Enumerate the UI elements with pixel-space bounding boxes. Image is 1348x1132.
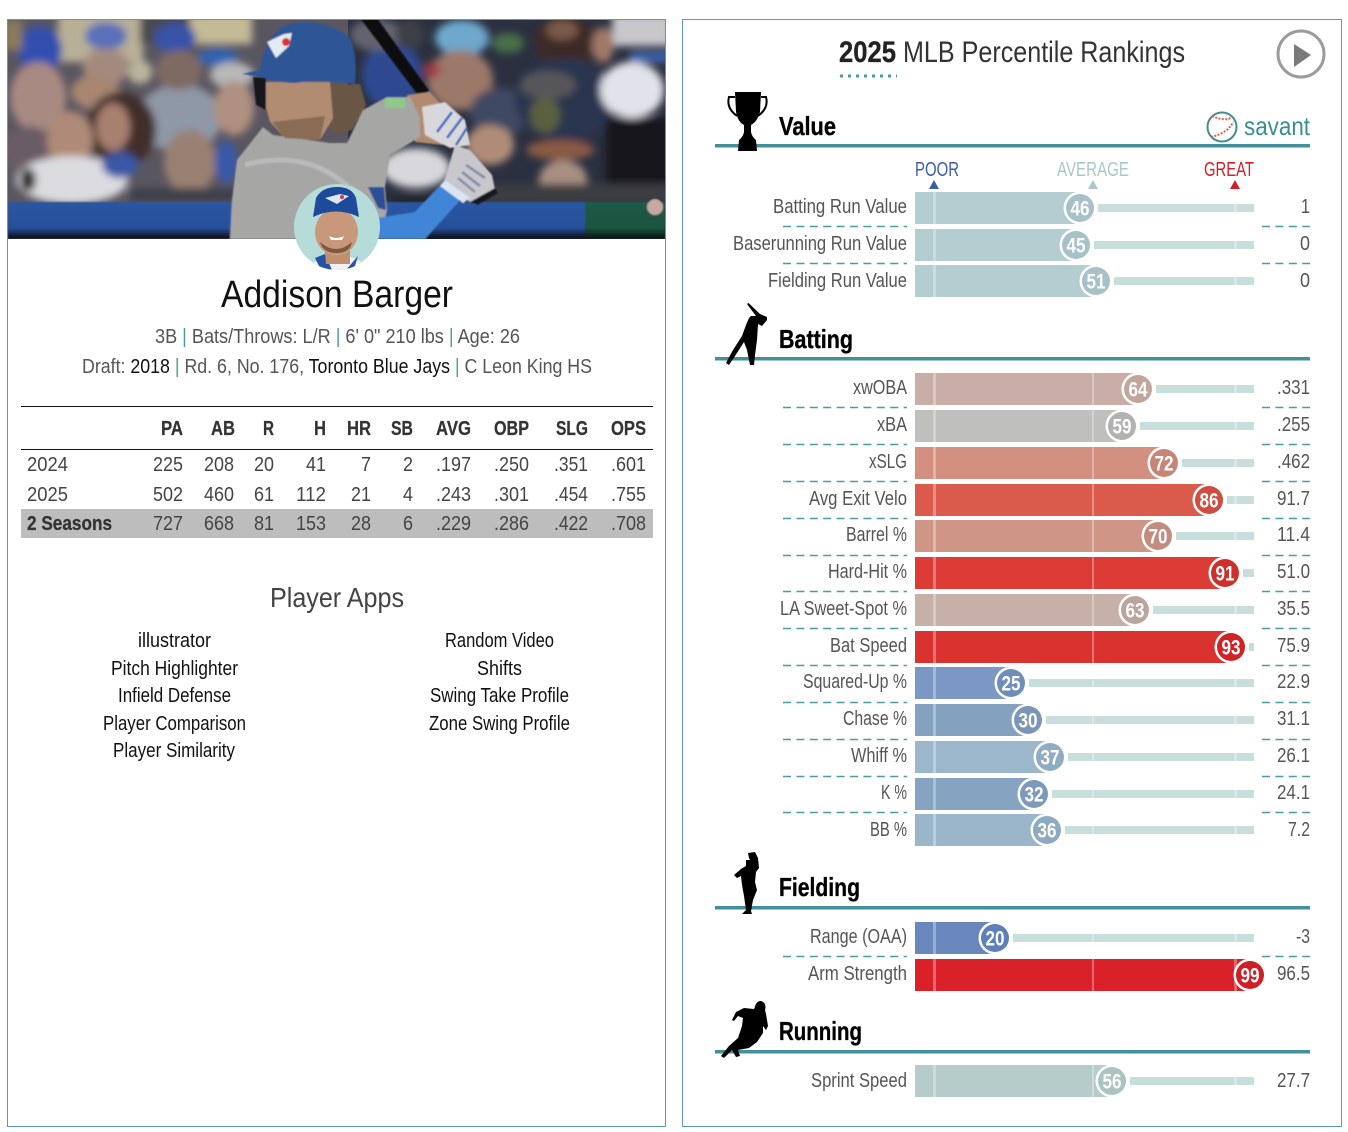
player apps heading: Player Apps <box>270 582 404 613</box>
blue sleeve <box>378 182 462 239</box>
icon: runner silhouette <box>721 1001 768 1058</box>
row 2 seasons: 153 <box>296 513 326 535</box>
row: Baserunning Run Value 45 <box>733 228 1310 264</box>
chart title: MLB Percentile Rankings <box>903 36 1185 69</box>
icon: batter silhouette <box>726 303 767 365</box>
scale legend: AVERAGE <box>1057 159 1129 181</box>
row: xSLG 72: xSLG <box>869 451 907 473</box>
row: Barrel % 70: 70 <box>1148 526 1168 548</box>
row: Baserunning Run Value 45: 0 <box>1300 233 1310 255</box>
row: Squared-Up % 25: 25 <box>1002 672 1021 696</box>
row: Squared-Up % 25 <box>783 666 1310 702</box>
section heading: Batting: Batting <box>779 324 853 354</box>
row: Avg Exit Velo 86: 86 <box>1200 490 1218 512</box>
section heading: Value: Value <box>779 111 836 141</box>
row: Batting Run Value 46: 46 <box>1070 198 1090 220</box>
row: LA Sweet-Spot % 63 <box>780 594 1310 628</box>
row: Whiff % 37: 26.1 <box>1277 745 1310 767</box>
row 2024 <box>27 454 646 476</box>
row 2024: .351 <box>554 454 588 476</box>
gloves <box>422 102 470 148</box>
section heading: Running: Running <box>779 1016 862 1046</box>
row 2 seasons <box>27 513 646 535</box>
table header: AVG <box>436 418 471 440</box>
row: Chase % 30: Chase % <box>843 708 907 730</box>
row: Sprint Speed 56: 56 <box>1102 1070 1122 1094</box>
row: Batting Run Value 46: Batting Run Value <box>773 196 907 218</box>
scale legend <box>915 159 1254 189</box>
row: BB % 36: BB % <box>870 819 907 841</box>
player apps: right list: Zone Swing Profile <box>429 713 570 735</box>
row 2 seasons: .708 <box>611 513 646 535</box>
row 2025: 460 <box>204 484 234 506</box>
table header: SB <box>391 418 413 440</box>
row: Fielding Run Value 51: Fielding Run Value <box>768 270 907 292</box>
row 2024: 2 <box>403 454 413 476</box>
row: Arm Strength 99: 99 <box>1240 964 1260 988</box>
section heading: Batting <box>715 303 1310 365</box>
helmet <box>242 22 356 84</box>
row: K % 32: 24.1 <box>1277 782 1310 804</box>
row: xSLG 72 <box>783 446 1310 482</box>
row: xSLG 72: 72 <box>1154 452 1174 476</box>
row: Avg Exit Velo 86: Avg Exit Velo <box>809 488 907 510</box>
player name: Addison Barger <box>221 274 453 316</box>
hair <box>328 83 366 134</box>
player apps: left list: Player Comparison <box>103 713 246 735</box>
row 2025: .755 <box>611 484 646 506</box>
row: Fielding Run Value 51 <box>768 264 1310 298</box>
savant logo: savant <box>1244 111 1311 141</box>
row: Baserunning Run Value 45: Baserunning Run Value <box>733 233 907 255</box>
row 2 seasons: .422 <box>554 513 588 535</box>
row: Fielding Run Value 51: 0 <box>1300 270 1310 292</box>
row 2025: 2025 <box>27 484 68 506</box>
row: Arm Strength 99: Arm Strength <box>808 963 907 985</box>
row: xBA 59: .255 <box>1277 414 1310 436</box>
row: Sprint Speed 56: 27.7 <box>1277 1070 1310 1092</box>
row: Arm Strength 99: 96.5 <box>1277 963 1310 985</box>
row: Whiff % 37: 37 <box>1040 746 1060 770</box>
row: Bat Speed 93: 75.9 <box>1277 635 1310 657</box>
row 2 seasons: 727 <box>153 513 183 535</box>
player apps: left list: Infield Defense <box>118 685 231 707</box>
row: xwOBA 64: xwOBA <box>853 377 908 399</box>
row 2024: .197 <box>436 454 471 476</box>
row: Chase % 30: 30 <box>1018 710 1038 732</box>
player apps: left list: Pitch Highlighter <box>111 658 238 680</box>
row 2 seasons: 668 <box>204 513 234 535</box>
section heading: Running <box>715 1001 1310 1058</box>
row: Range (OAA) 20: 20 <box>986 928 1004 950</box>
row 2024: 20 <box>254 454 274 476</box>
table header: HR <box>347 418 371 440</box>
row: K % 32: 32 <box>1024 784 1044 806</box>
row: LA Sweet-Spot % 63: LA Sweet-Spot % <box>780 598 907 620</box>
row: xBA 59: xBA <box>877 414 908 436</box>
table header <box>161 418 646 440</box>
row: xSLG 72: .462 <box>1277 451 1310 473</box>
face <box>264 82 333 140</box>
row: BB % 36: 36 <box>1038 820 1056 842</box>
row: Range (OAA) 20: Range (OAA) <box>810 926 907 948</box>
table header: OPS <box>611 418 646 440</box>
row: K % 32: K % <box>881 782 907 804</box>
row 2025: 4 <box>403 484 413 506</box>
row 2 seasons: 6 <box>403 513 413 535</box>
section heading: Value <box>715 92 1310 151</box>
row: Hard-Hit % 91: Hard-Hit % <box>828 561 907 583</box>
row: BB % 36 <box>870 814 1310 846</box>
bio line: 3B | Bats/Throws: L/R | 6' 0" 210 lbs | Age: 26 <box>155 326 520 348</box>
player apps: left list: illustrator <box>138 630 211 652</box>
row: Hard-Hit % 91: 51.0 <box>1277 561 1310 583</box>
row: Sprint Speed 56 <box>811 1064 1310 1098</box>
table header: AB <box>211 418 235 440</box>
chart title <box>839 36 1185 76</box>
row 2025 <box>27 484 646 506</box>
row 2 seasons: 2 Seasons <box>27 513 112 535</box>
row: Arm Strength 99 <box>808 958 1310 992</box>
row: xwOBA 64 <box>783 372 1310 408</box>
row 2 seasons: .229 <box>436 513 471 535</box>
player apps: right list: Swing Take Profile <box>430 685 569 707</box>
player apps: right list: Random Video <box>445 630 554 652</box>
draft line: Draft: 2018 | Rd. 6, No. 176, Toronto Blue Jays | C Leon King HS <box>82 356 592 378</box>
player apps: left list: Player Similarity <box>113 740 235 762</box>
player apps: right list: Shifts <box>477 658 522 680</box>
row: Hard-Hit % 91 <box>783 556 1310 592</box>
table header: OBP <box>494 418 529 440</box>
table header: R <box>263 418 274 440</box>
row: Barrel % 70 <box>783 520 1310 556</box>
icon: fielder silhouette <box>734 852 759 914</box>
row: Baserunning Run Value 45: 45 <box>1066 234 1086 258</box>
row: Whiff % 37: Whiff % <box>851 745 907 767</box>
row: Batting Run Value 46: 1 <box>1301 196 1310 218</box>
row 2025: 112 <box>296 484 326 506</box>
row: Bat Speed 93 <box>783 630 1310 666</box>
player action photo <box>2 14 672 239</box>
career stats table <box>21 406 653 538</box>
icon: play button <box>1278 31 1324 77</box>
table header: SLG <box>556 418 588 440</box>
panel: player card <box>2 14 672 1126</box>
row 2 seasons: 28 <box>351 513 371 535</box>
row: Chase % 30 <box>783 704 1310 740</box>
table header: H <box>314 418 326 440</box>
player headshot <box>293 183 381 272</box>
row: Squared-Up % 25: 22.9 <box>1277 671 1310 693</box>
row: Barrel % 70: Barrel % <box>846 524 907 546</box>
row 2024: .601 <box>611 454 646 476</box>
chart title: 2025 <box>839 36 896 69</box>
panel: percentile rankings <box>682 20 1342 1126</box>
row 2024: 225 <box>153 454 183 476</box>
icon: trophy <box>728 92 767 151</box>
row: xBA 59 <box>783 410 1310 444</box>
row: Range (OAA) 20: -3 <box>1296 926 1310 948</box>
row 2025: .301 <box>494 484 529 506</box>
row 2025: .243 <box>436 484 471 506</box>
row: Batting Run Value 46 <box>773 192 1310 226</box>
row 2025: .454 <box>554 484 588 506</box>
row: Whiff % 37 <box>783 740 1310 776</box>
row: Barrel % 70: 11.4 <box>1277 524 1310 546</box>
row 2 seasons: .286 <box>494 513 529 535</box>
row 2024: 7 <box>361 454 371 476</box>
row 2025: 502 <box>153 484 183 506</box>
row: K % 32 <box>783 778 1310 812</box>
savant logo <box>1208 111 1311 142</box>
bat <box>360 18 430 99</box>
section heading: Fielding: Fielding <box>779 872 860 902</box>
row: LA Sweet-Spot % 63: 35.5 <box>1277 598 1310 620</box>
row: xwOBA 64: .331 <box>1277 377 1310 399</box>
row: Range (OAA) 20 <box>783 922 1310 956</box>
row 2 seasons: 81 <box>254 513 274 535</box>
row 2025: 21 <box>351 484 371 506</box>
row: BB % 36: 7.2 <box>1288 819 1310 841</box>
row: Avg Exit Velo 86 <box>783 484 1310 518</box>
row: Bat Speed 93: Bat Speed <box>830 635 907 657</box>
row 2024: 41 <box>306 454 326 476</box>
row: LA Sweet-Spot % 63: 63 <box>1126 600 1144 622</box>
row: xBA 59: 59 <box>1112 416 1132 438</box>
player apps: right list <box>429 630 570 735</box>
row 2025: 61 <box>254 484 274 506</box>
scale legend: POOR <box>915 159 959 181</box>
row: Fielding Run Value 51: 51 <box>1086 270 1106 294</box>
section heading: Fielding <box>715 852 1310 914</box>
table header: PA <box>161 418 183 440</box>
row: Chase % 30: 31.1 <box>1277 708 1310 730</box>
row 2024: .250 <box>494 454 529 476</box>
row 2024: 208 <box>204 454 234 476</box>
row: Avg Exit Velo 86: 91.7 <box>1277 488 1310 510</box>
player apps: left list <box>103 630 246 762</box>
row: Squared-Up % 25: Squared-Up % <box>803 671 907 693</box>
row: Bat Speed 93: 93 <box>1222 636 1240 660</box>
row: Hard-Hit % 91: 91 <box>1216 562 1235 586</box>
row: xwOBA 64: 64 <box>1128 378 1148 402</box>
scale legend: GREAT <box>1204 159 1254 181</box>
row: Sprint Speed 56: Sprint Speed <box>811 1070 907 1092</box>
row 2024: 2024 <box>27 454 68 476</box>
jersey <box>230 97 420 239</box>
